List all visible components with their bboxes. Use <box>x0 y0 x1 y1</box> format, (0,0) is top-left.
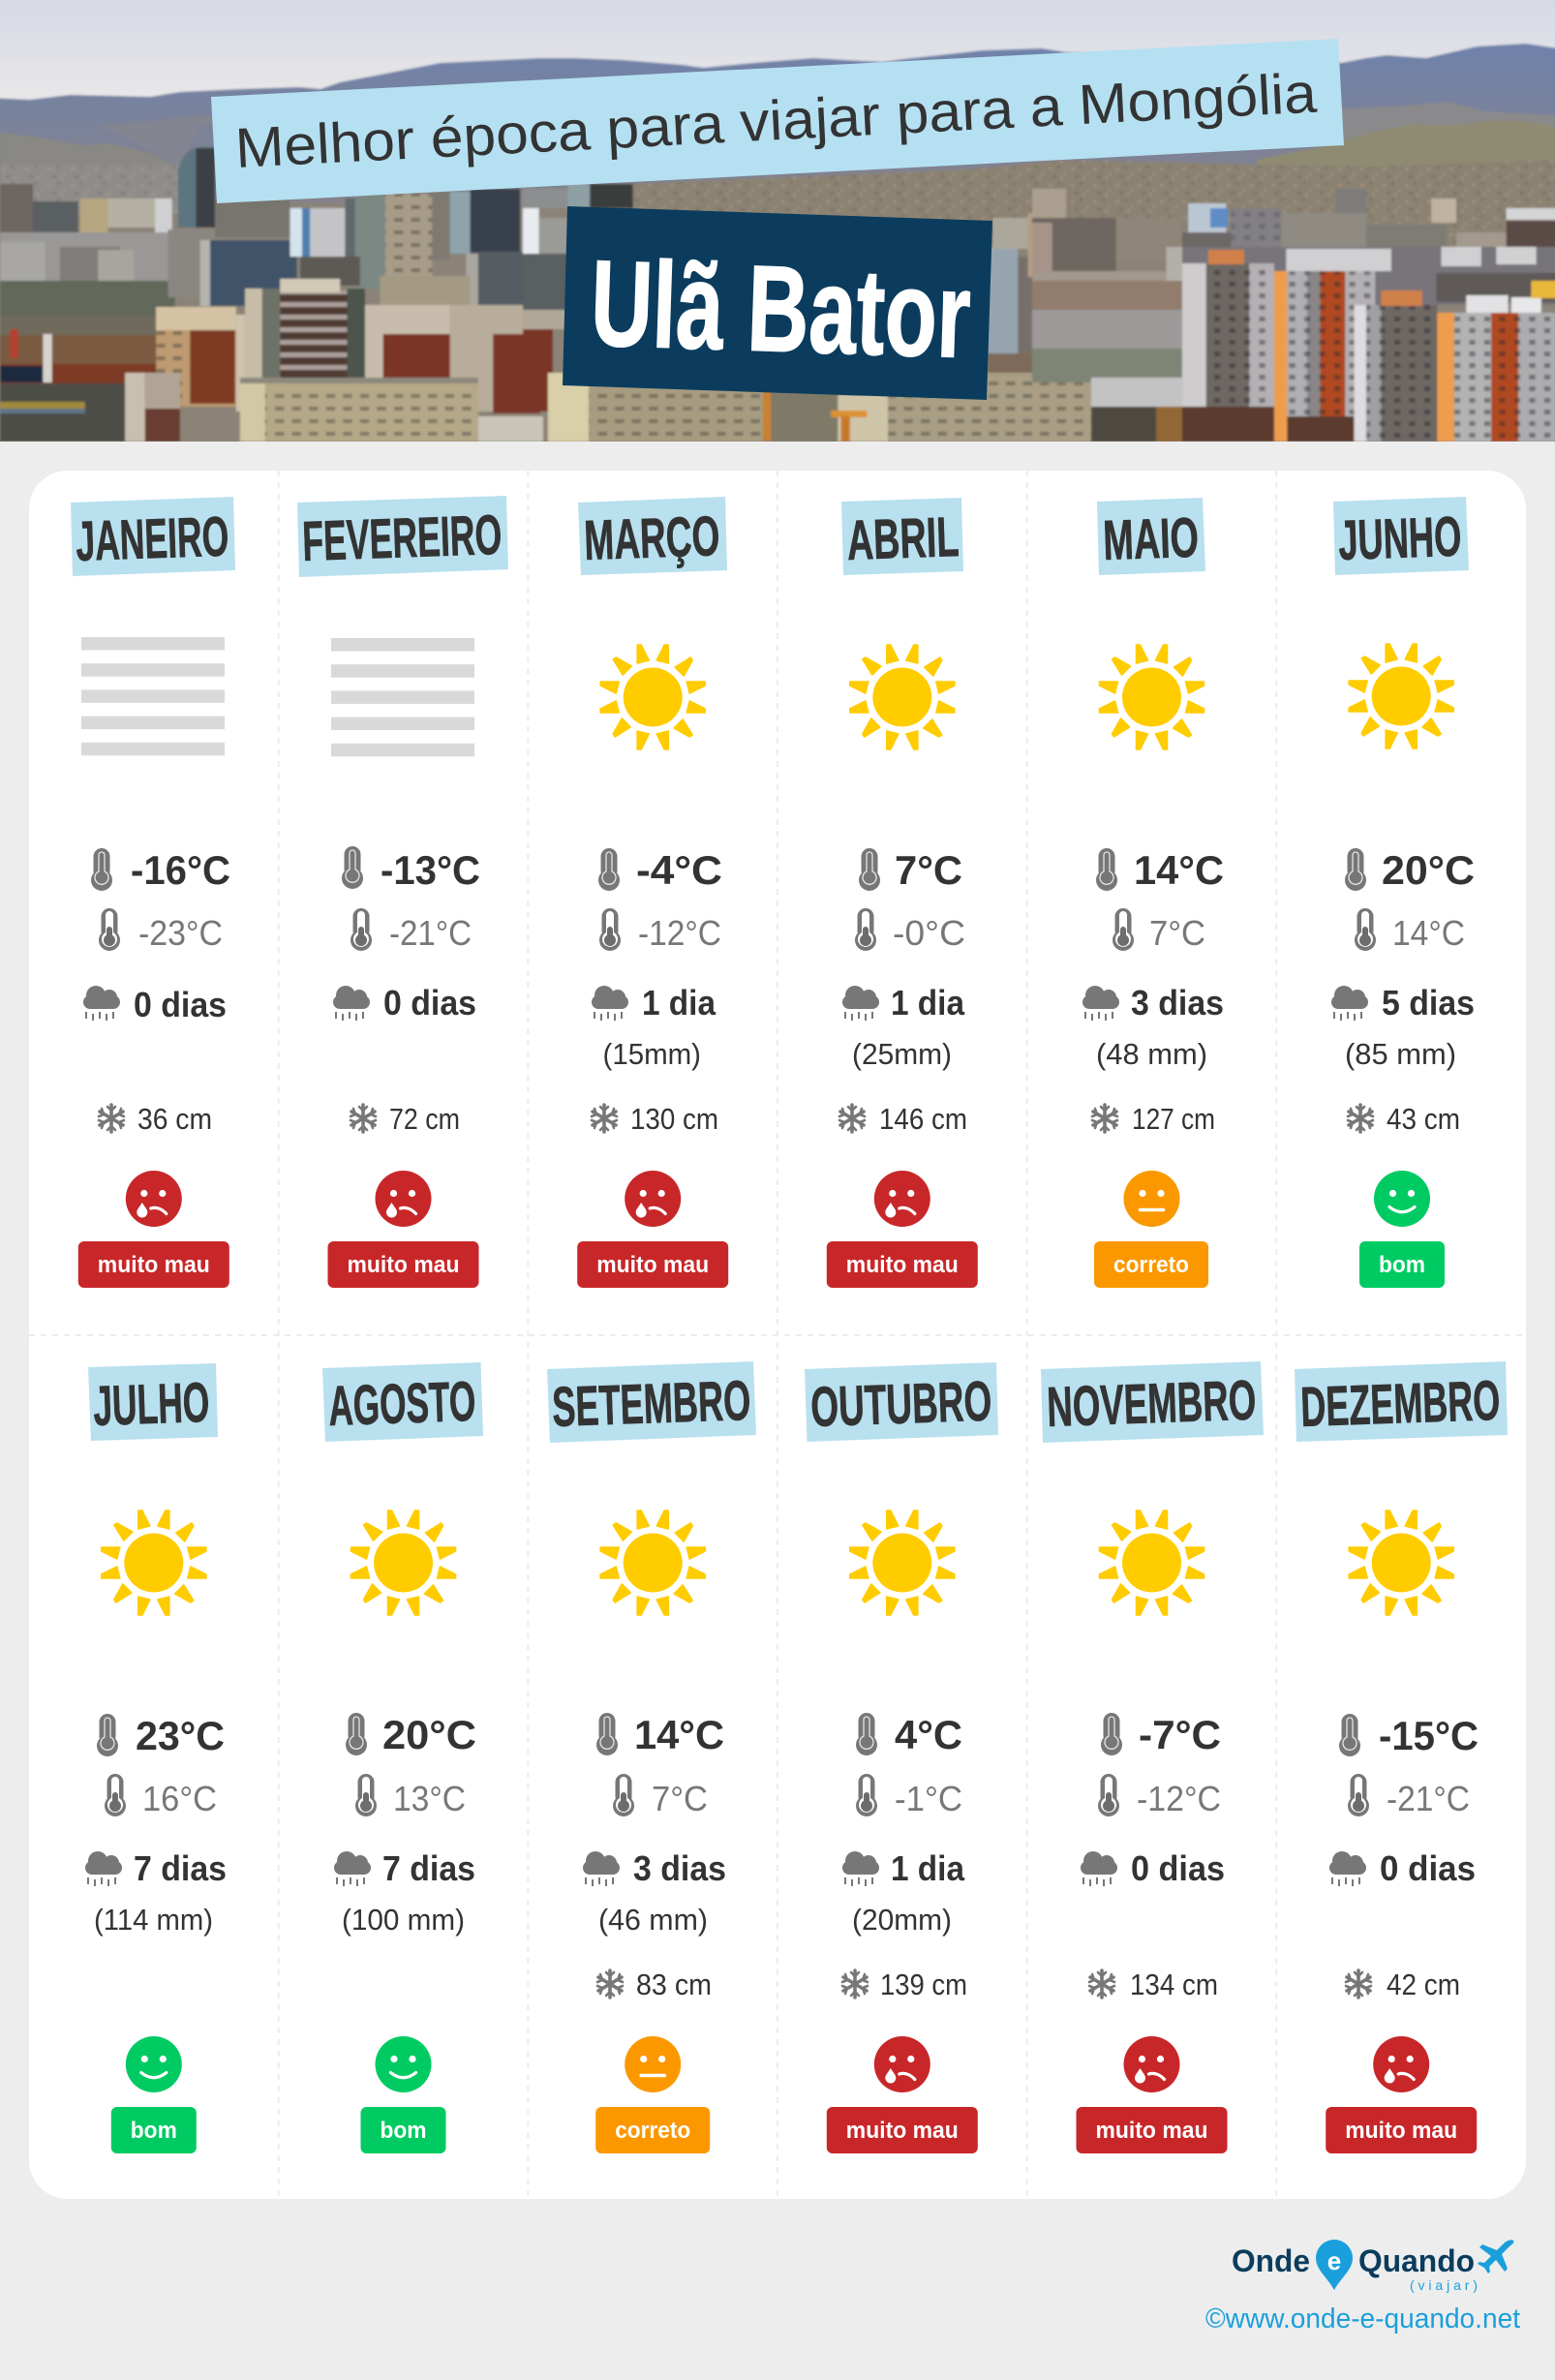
min temperature: 7°C <box>652 1779 708 1818</box>
rating face <box>874 1171 930 1227</box>
min temperature: 13°C <box>393 1779 466 1818</box>
min temperature <box>105 1774 217 1818</box>
rating badge <box>327 1241 478 1288</box>
min temperature: -0°C <box>893 913 965 953</box>
rain days: 0 dias <box>1380 1848 1476 1888</box>
snow: 127 cm <box>1132 1102 1215 1136</box>
max temperature <box>342 846 480 893</box>
snow: 36 cm <box>137 1102 212 1136</box>
rain days <box>85 1848 227 1888</box>
month: Junho <box>1331 497 1475 1288</box>
min temperature: -21°C <box>389 913 472 953</box>
min temperature <box>99 908 223 953</box>
rating badge <box>577 1241 728 1288</box>
month: Outubro <box>805 1362 998 2153</box>
month heading <box>841 498 963 575</box>
min temperature <box>1355 908 1465 953</box>
rain days: 1 dia <box>891 1848 965 1888</box>
month: Abril <box>827 498 978 1288</box>
title ribbon: Melhor época para viajar para a Mongólia <box>233 61 1319 180</box>
month: Novembro <box>1041 1361 1264 2153</box>
month heading <box>297 496 508 577</box>
month heading: FEVEREIRO <box>301 503 503 573</box>
rain days: 5 dias <box>1382 983 1475 1022</box>
rating badge <box>360 2107 445 2153</box>
month heading: AGOSTO <box>327 1370 476 1438</box>
snow: 72 cm <box>389 1102 460 1136</box>
min temperature <box>613 1774 708 1818</box>
rain days: 3 dias <box>633 1848 726 1888</box>
min temperature <box>1348 1774 1470 1818</box>
rain days <box>842 983 965 1022</box>
icon: fog <box>81 637 225 755</box>
snow: 139 cm <box>880 1968 967 2001</box>
icon: fog <box>331 638 474 756</box>
logo: Onde e Quando viajar: (viajar) <box>1410 2277 1478 2293</box>
rating badge <box>111 2107 197 2153</box>
min temperature <box>355 1774 466 1818</box>
rain days: 3 dias <box>1131 983 1224 1022</box>
snow <box>1089 1968 1218 2001</box>
icon: sun <box>1349 1510 1453 1615</box>
logo: Onde e Quando viajar: Quando <box>1358 2243 1475 2278</box>
min temperature: -21°C <box>1387 1779 1470 1818</box>
month heading: MARÇO <box>583 504 720 572</box>
month: Dezembro <box>1295 1361 1508 2153</box>
snow <box>592 1102 718 1136</box>
rating badge: correto <box>1113 1252 1189 1278</box>
max temperature: -15°C <box>1379 1713 1479 1758</box>
rain days <box>1082 983 1224 1022</box>
month: Janeiro <box>71 497 235 1288</box>
icon: sun <box>600 645 705 749</box>
month heading <box>1097 498 1205 575</box>
icon: sun <box>1100 1510 1204 1615</box>
rating badge <box>78 1241 229 1288</box>
rating badge: muito mau <box>596 1252 709 1278</box>
snow <box>1092 1102 1215 1136</box>
rating badge <box>827 1241 978 1288</box>
min temperature <box>351 908 472 953</box>
month: Setembro <box>547 1361 756 2153</box>
rating badge: correto <box>615 2118 690 2144</box>
month heading: JULHO <box>92 1371 210 1438</box>
icon: airplane <box>1478 2240 1514 2273</box>
min temperature: 14°C <box>1392 913 1465 953</box>
rain days <box>1081 1848 1225 1888</box>
min temperature: 7°C <box>1149 913 1205 953</box>
rain days <box>333 983 476 1022</box>
rainfall: (48 mm) <box>1096 1037 1207 1071</box>
logo: Onde e Quando viajar <box>1232 2240 1514 2293</box>
max temperature: 20°C <box>382 1712 476 1757</box>
rating badge <box>1326 2107 1477 2153</box>
min temperature: -23°C <box>138 913 223 953</box>
max temperature <box>859 847 962 893</box>
max temperature: 14°C <box>1134 847 1224 893</box>
month heading: JANEIRO <box>75 505 229 573</box>
rating badge: bom <box>380 2118 426 2144</box>
month heading <box>71 497 235 576</box>
rain days <box>334 1848 475 1888</box>
rainfall: (85 mm) <box>1345 1037 1456 1071</box>
rain days: 0 dias <box>383 983 476 1022</box>
max temperature: 20°C <box>1382 847 1475 893</box>
rain days: 7 dias <box>134 1848 227 1888</box>
min temperature <box>1098 1774 1221 1818</box>
rainfall: (20mm) <box>852 1903 952 1937</box>
month heading <box>805 1362 998 1442</box>
rating face <box>126 2036 182 2092</box>
month heading <box>578 497 727 575</box>
title ribbon <box>211 39 1344 203</box>
icon: sun <box>850 1510 955 1615</box>
max temperature <box>598 847 722 893</box>
month heading: SETEMBRO <box>551 1369 751 1439</box>
snow <box>1346 1968 1460 2001</box>
rain days: 7 dias <box>382 1848 475 1888</box>
icon: sun <box>600 1510 705 1615</box>
icon: sun <box>1349 644 1453 748</box>
month heading: OUTUBRO <box>809 1370 992 1439</box>
rating face <box>874 2036 930 2092</box>
rainfall: (15mm) <box>602 1037 701 1071</box>
icon: sun <box>102 1510 206 1615</box>
month: Fevereiro <box>297 496 508 1288</box>
rain days: 1 dia <box>891 983 965 1022</box>
rating badge: muito mau <box>1345 2118 1457 2144</box>
min temperature: -12°C <box>638 913 721 953</box>
rainfall: (100 mm) <box>342 1903 465 1937</box>
max temperature: -16°C <box>131 847 230 893</box>
rainfall: (114 mm) <box>94 1903 213 1937</box>
rating face <box>376 2036 432 2092</box>
rating badge <box>595 2107 710 2153</box>
rating face <box>126 1171 182 1227</box>
rain days <box>583 1848 726 1888</box>
max temperature <box>346 1712 476 1757</box>
rain days <box>83 985 227 1024</box>
max temperature: 7°C <box>895 847 962 893</box>
rating badge: muito mau <box>347 1252 459 1278</box>
rain days <box>1331 983 1475 1022</box>
snow: 130 cm <box>630 1102 718 1136</box>
max temperature: 14°C <box>634 1712 724 1757</box>
banner photo: Ulã Bator skyline <box>0 0 1555 451</box>
icon: location pin <box>1316 2240 1353 2290</box>
rating badge <box>1077 2107 1228 2153</box>
rating badge: muito mau <box>1096 2118 1208 2144</box>
rating badge <box>1359 1241 1445 1288</box>
snow: 134 cm <box>1130 1968 1218 2001</box>
max temperature: 4°C <box>895 1712 962 1757</box>
rain days: 0 dias <box>134 985 227 1024</box>
snow: 83 cm <box>636 1968 712 2001</box>
rainfall: (25mm) <box>852 1037 952 1071</box>
snow <box>839 1102 967 1136</box>
max temperature <box>97 1713 225 1758</box>
max temperature: -13°C <box>381 847 480 893</box>
min temperature: -1°C <box>895 1779 962 1818</box>
month heading <box>322 1362 483 1442</box>
icon: sun <box>1100 645 1204 749</box>
month heading <box>547 1361 756 1443</box>
snow <box>842 1968 967 2001</box>
rain days <box>842 1848 965 1888</box>
month: Julho <box>85 1363 227 2153</box>
max temperature: -4°C <box>636 847 722 893</box>
rating badge: muito mau <box>98 1252 210 1278</box>
logo: Onde e Quando viajar: e <box>1327 2246 1341 2275</box>
max temperature <box>91 847 230 893</box>
snow: 146 cm <box>879 1102 967 1136</box>
month heading <box>1041 1361 1264 1443</box>
rating badge <box>827 2107 978 2153</box>
max temperature <box>1339 1713 1479 1758</box>
month: Maio <box>1082 498 1224 1288</box>
max temperature <box>1101 1712 1221 1757</box>
rating face <box>625 1171 681 1227</box>
min temperature <box>855 908 965 953</box>
month heading <box>1333 497 1469 575</box>
rainfall: (46 mm) <box>598 1903 708 1937</box>
rating badge: bom <box>1379 1252 1425 1278</box>
max temperature: -7°C <box>1139 1712 1221 1757</box>
rating face <box>1123 1171 1179 1227</box>
snow <box>351 1102 460 1136</box>
min temperature <box>1113 908 1205 953</box>
rating badge: bom <box>131 2118 177 2144</box>
rating face <box>1123 2036 1179 2092</box>
icon: sun <box>351 1510 455 1615</box>
rating badge: muito mau <box>846 2118 959 2144</box>
rating face <box>1373 2036 1429 2092</box>
month heading: MAIO <box>1102 506 1200 572</box>
month heading <box>88 1363 218 1441</box>
rating badge <box>1094 1241 1208 1288</box>
rating face <box>1374 1171 1430 1227</box>
month: Agosto <box>322 1362 483 2153</box>
rating face <box>625 2036 681 2092</box>
snow <box>1348 1102 1460 1136</box>
rating badge: muito mau <box>846 1252 959 1278</box>
snow <box>597 1968 712 2001</box>
rain days: 0 dias <box>1131 1848 1225 1888</box>
rating face <box>376 1171 432 1227</box>
rain days <box>592 983 717 1022</box>
min temperature: 16°C <box>142 1779 217 1818</box>
month: Março <box>577 497 728 1288</box>
min temperature <box>856 1774 962 1818</box>
min temperature: -12°C <box>1137 1779 1221 1818</box>
month heading: JUNHO <box>1337 505 1462 572</box>
snow: 43 cm <box>1387 1102 1460 1136</box>
rain days <box>1329 1848 1476 1888</box>
month heading: NOVEMBRO <box>1046 1368 1257 1439</box>
city heading: Ulã Bator: Ulã Bator <box>589 234 973 383</box>
min temperature <box>599 908 721 953</box>
max temperature: 23°C <box>136 1713 225 1758</box>
snow: 42 cm <box>1387 1968 1460 2001</box>
month heading: ABRIL <box>846 505 960 572</box>
calendar panel <box>29 471 1526 2199</box>
icon: sun <box>850 645 955 749</box>
logo: Onde e Quando viajar: Onde <box>1232 2243 1310 2278</box>
rain days: 1 dia <box>642 983 717 1022</box>
city heading: Ulã Bator <box>563 206 992 400</box>
website credit: ©www.onde-e-quando.net <box>1205 2304 1520 2334</box>
snow <box>99 1102 212 1136</box>
max temperature <box>856 1712 962 1757</box>
